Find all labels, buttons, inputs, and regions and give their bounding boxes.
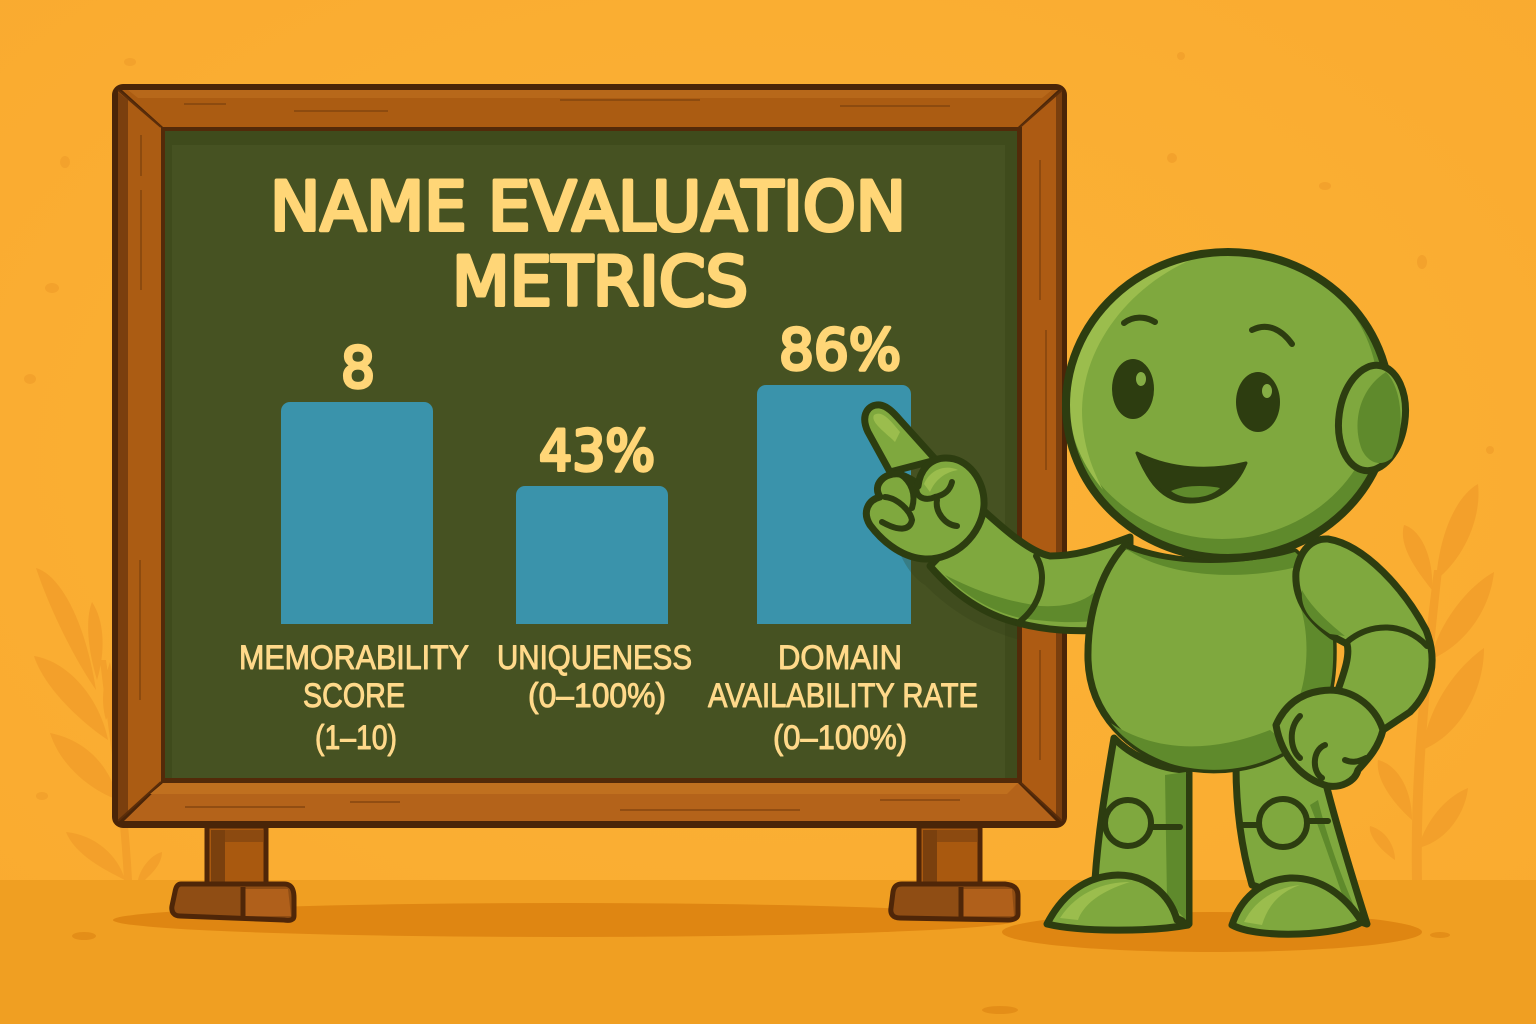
metric: domain availability rate [708, 318, 978, 757]
ground shadows [113, 903, 1422, 952]
metric: uniqueness: UNIQUENESS [497, 639, 692, 677]
metric: uniqueness: (0–100%) [528, 677, 666, 715]
right leg [1232, 752, 1367, 934]
metric: domain availability rate: (0–100%) [773, 719, 907, 757]
pointing arm [930, 511, 1130, 631]
metric: uniqueness: 43% [539, 419, 655, 484]
right decorative plant [1370, 484, 1494, 880]
metric: memorability score: MEMORABILITY [239, 639, 469, 677]
metric: uniqueness [497, 419, 692, 715]
right stand leg [891, 826, 1018, 920]
head [1066, 247, 1390, 558]
metric: memorability score: 8 [341, 336, 375, 401]
left leg [1047, 738, 1189, 930]
metric: domain availability rate: AVAILABILITY RATE [708, 677, 978, 715]
left decorative plant [34, 568, 162, 880]
metric: domain availability rate: DOMAIN [778, 639, 902, 677]
right arm [1296, 539, 1432, 732]
torso [1088, 545, 1340, 773]
title [270, 168, 906, 322]
metric: memorability score: SCORE [303, 677, 405, 715]
arm shadow on board [894, 480, 1020, 640]
metric: memorability score [239, 336, 469, 757]
left stand leg [172, 826, 294, 920]
pointing hand [865, 405, 984, 559]
metric: memorability score: (1–10) [315, 719, 397, 757]
resting hand [1276, 690, 1383, 786]
title: NAME EVALUATION [270, 168, 906, 247]
floor [0, 880, 1536, 1024]
metric: domain availability rate: 86% [779, 318, 901, 383]
face [1112, 318, 1292, 502]
title: METRICS [452, 243, 748, 322]
robot character [865, 247, 1432, 934]
chalkboard surface [161, 127, 1022, 783]
board frame [112, 84, 1067, 828]
ear [1332, 361, 1412, 475]
